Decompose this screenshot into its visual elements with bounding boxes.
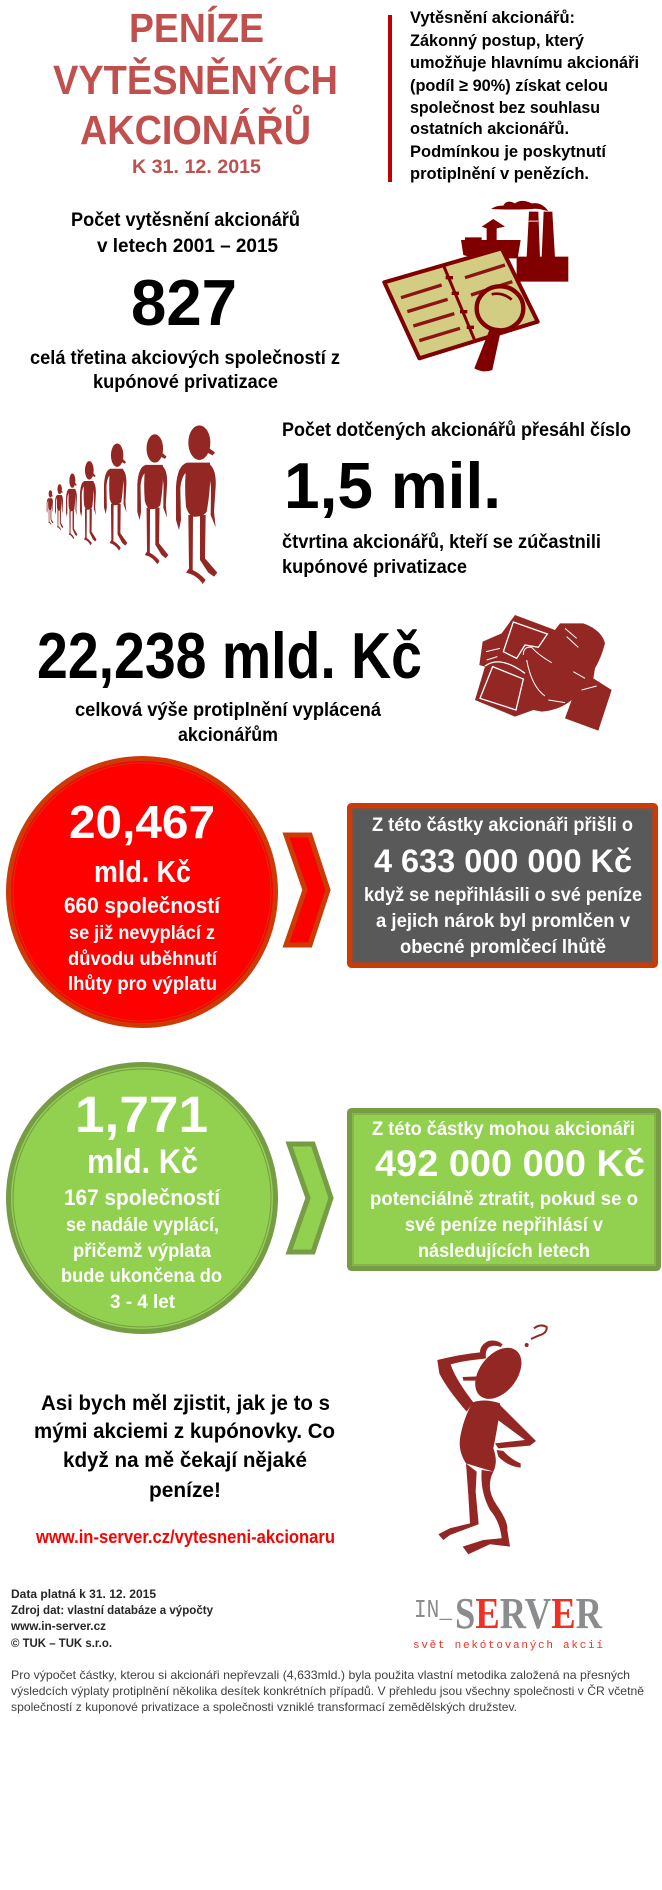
methodology note: výsledcích výplaty protiplnění několika desítek konkrétních případů. V přehledu jsou všechny společnosti v ČR včetně <box>11 1683 644 1698</box>
definition text: Zákonný postup, který <box>410 31 585 50</box>
arrow: green chevron <box>289 1144 331 1252</box>
stat: 1,5 mil. shareholders <box>282 420 631 578</box>
call to action text: peníze! <box>149 1479 221 1502</box>
stat: 1,5 mil. shareholders: 1,5 mil. <box>284 449 501 522</box>
stat: 827 squeeze-outs: celá třetina akciových společností z <box>30 348 340 369</box>
panel: red circle 20,467: důvodu uběhnutí <box>68 949 218 970</box>
title: AKCIONÁŘŮ <box>80 104 311 153</box>
logo: IN-SERVER: IN_ <box>414 1595 452 1625</box>
methodology note: společností z kuponové privatizace a společnosti vzniklé transformací zemědělských družstev. <box>11 1700 517 1714</box>
definition text: společnost bez souhlasu <box>410 98 600 117</box>
panel: green box potential loss: své peníze nepřihlásí v <box>405 1215 603 1236</box>
panel: green circle 1,771: 1,771 <box>75 1086 208 1143</box>
panel: green box potential loss: 492 000 000 Kč <box>375 1143 645 1184</box>
logo: IN-SERVER: SERVER <box>455 1589 603 1638</box>
icon: factory and book with magnifier <box>384 201 568 371</box>
call to action text: když na mě čekají nějaké <box>63 1449 307 1472</box>
panel: red circle 20,467: lhůty pro výplatu <box>68 974 217 995</box>
source notes: Zdroj dat: vlastní databáze a výpočty <box>11 1603 213 1617</box>
panel: grey box lost amount: obecné promlčecí lhůtě <box>400 937 606 958</box>
panel: green circle 1,771: 3 - 4 let <box>110 1292 176 1313</box>
panel: red circle 20,467: 660 společností <box>64 893 221 918</box>
definition text: (podíl ≥ 90%) získat celou <box>410 76 608 95</box>
panel: grey box lost amount: a jejich nárok byl promlčen v <box>376 911 630 932</box>
stat: 827 squeeze-outs: Počet vytěsnění akcionářů <box>71 210 300 231</box>
source notes: www.in-server.cz <box>10 1619 106 1633</box>
definition text: Podmínkou je poskytnutí <box>410 142 607 161</box>
panel: green circle 1,771: mld. Kč <box>87 1143 198 1181</box>
definition text: protiplnění v penězích. <box>410 164 589 183</box>
title: VYTĚSNĚNÝCH <box>53 57 338 103</box>
definition text: Vytěsnění akcionářů: <box>410 8 575 27</box>
panel: green box potential loss: potenciálně ztratit, pokud se o <box>370 1189 638 1210</box>
title: PENÍZE <box>129 5 264 51</box>
stat: 1,5 mil. shareholders: čtvrtina akcionářů, kteří se zúčastnili <box>282 532 601 553</box>
stat: 1,5 mil. shareholders: kupónové privatizace <box>282 557 467 578</box>
stat: 827 squeeze-outs <box>30 210 340 393</box>
panel: green circle 1,771: přičemž výplata <box>73 1241 211 1262</box>
methodology note: Pro výpočet částky, kterou si akcionáři nepřevzali (4,633mld.) byla použita vlastní metodika založená na přesných <box>11 1668 630 1682</box>
definition text <box>410 8 639 183</box>
title <box>53 5 338 178</box>
logo: IN-SERVER: svět nekótovaných akcií <box>413 1640 603 1652</box>
stat: 1,5 mil. shareholders: Počet dotčených akcionářů přesáhl číslo <box>282 420 631 441</box>
panel: green circle 1,771 <box>8 1064 276 1332</box>
source notes <box>10 1587 213 1650</box>
stat: 22,238 mld. Kč: celková výše protiplnění vyplácená <box>75 700 381 721</box>
icon: row of growing people <box>47 425 217 584</box>
icon: thinking figure with question mark <box>437 1325 547 1554</box>
stat: 22,238 mld. Kč: akcionářům <box>178 725 278 746</box>
panel: green box potential loss: následujících letech <box>418 1241 590 1262</box>
definition accent bar <box>388 15 392 182</box>
stat: 22,238 mld. Kč: 22,238 mld. Kč <box>37 619 422 692</box>
stat: 827 squeeze-outs: 827 <box>131 266 237 339</box>
call to action text: Asi bych měl zjistit, jak je to s <box>41 1392 330 1415</box>
arrow: red chevron <box>286 835 328 945</box>
panel: red circle 20,467: se již nevyplácí z <box>69 923 215 944</box>
source notes: Data platná k 31. 12. 2015 <box>11 1587 156 1601</box>
panel: red circle 20,467: mld. Kč <box>94 854 191 889</box>
panel: green circle 1,771: 167 společností <box>64 1185 221 1210</box>
methodology note <box>11 1668 644 1714</box>
source notes: © TUK – TUK s.r.o. <box>11 1636 112 1650</box>
call to action text <box>34 1392 335 1502</box>
panel: grey box lost amount <box>350 806 656 966</box>
icon: hand holding banknotes <box>475 615 612 731</box>
definition text: ostatních akcionářů. <box>410 119 569 138</box>
stat: 827 squeeze-outs: kupónové privatizace <box>93 372 278 393</box>
stat: 827 squeeze-outs: v letech 2001 – 2015 <box>97 236 278 257</box>
stat: 22,238 mld. Kč <box>37 619 422 746</box>
panel: green box potential loss <box>350 1110 658 1268</box>
call to action text: mými akciemi z kupónovky. Co <box>34 1420 335 1443</box>
title: K 31. 12. 2015 <box>132 157 261 178</box>
link url: www.in-server.cz/vytesneni-akcionaru <box>35 1527 335 1547</box>
panel: grey box lost amount: když se nepřihlásili o své peníze <box>364 885 642 906</box>
panel: grey box lost amount: 4 633 000 000 Kč <box>374 843 632 879</box>
panel: green box potential loss: Z této částky mohou akcionáři <box>372 1119 635 1140</box>
logo: IN-SERVER <box>413 1589 603 1652</box>
panel: grey box lost amount: Z této částky akcionáři přišli o <box>372 815 633 836</box>
panel: green circle 1,771: se nadále vyplácí, <box>66 1215 219 1236</box>
panel: red circle 20,467: 20,467 <box>69 796 215 848</box>
definition text: umožňuje hlavnímu akcionáři <box>410 53 639 72</box>
panel: green circle 1,771: bude ukončena do <box>61 1266 222 1287</box>
panel: red circle 20,467 <box>8 758 276 1026</box>
